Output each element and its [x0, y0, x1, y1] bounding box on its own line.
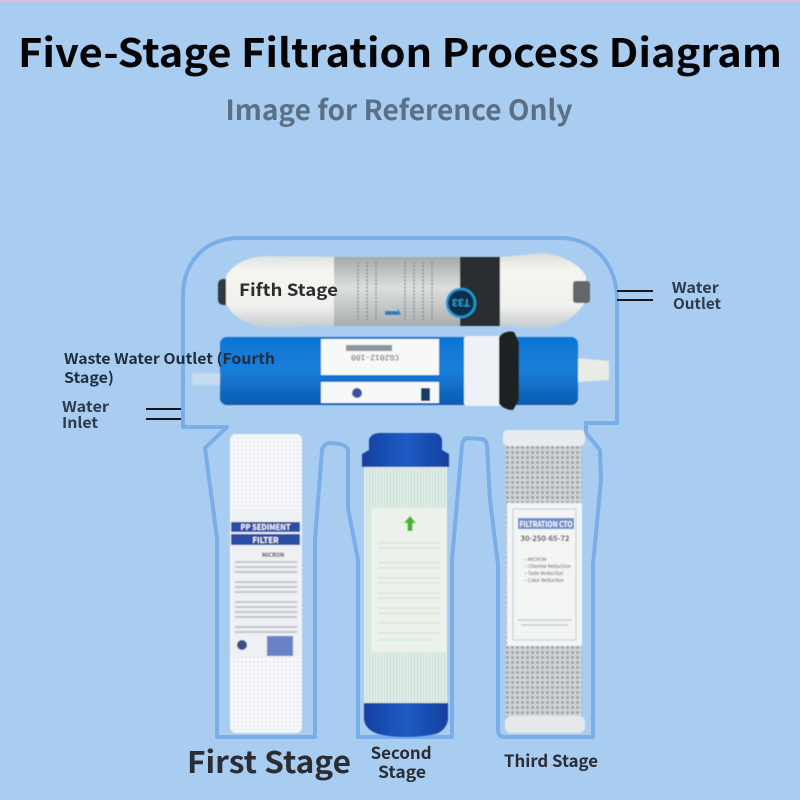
- label: [232, 509, 300, 657]
- dotted body: [230, 434, 302, 733]
- label fine print: [358, 262, 432, 320]
- label: second stage: Stage: [378, 759, 426, 783]
- top cap: [503, 430, 585, 446]
- blue banner: [518, 518, 574, 529]
- bottom cap: [505, 716, 585, 733]
- blue stripe: [321, 375, 439, 382]
- white housing: [226, 253, 586, 328]
- fourth stage filter: [192, 332, 609, 410]
- feature list: •Chlorine Reduction: [523, 563, 571, 570]
- badge: [352, 388, 362, 398]
- white band: [464, 336, 503, 406]
- white sticker: [321, 339, 439, 403]
- micron: MICRON: [262, 551, 284, 559]
- right stem: [575, 358, 609, 382]
- fine print: [235, 562, 297, 632]
- banner text 2: FILTER: [252, 535, 279, 546]
- feature list: •Taste Reduction: [523, 570, 564, 577]
- label: waste water outlet: Stage): [64, 367, 114, 388]
- silver label: [334, 257, 462, 326]
- label: waste water outlet: Waste Water Outlet (Fourth: [64, 348, 275, 369]
- label: water outlet: Outlet: [673, 293, 722, 314]
- code: 30-250-65-72: [520, 533, 570, 544]
- black ring: [499, 332, 519, 410]
- blue banner 2: [231, 534, 300, 545]
- green arrow: [404, 516, 416, 531]
- label: second stage: Second: [371, 740, 432, 764]
- second stage filter: [362, 433, 449, 737]
- model text: CG2012-100: [351, 352, 399, 361]
- ribbed body: [364, 466, 447, 706]
- sticker barcode: [346, 345, 392, 351]
- top cap: [362, 433, 449, 467]
- banner text 1: PP SEDIMENT: [240, 522, 290, 533]
- left stem: [192, 373, 224, 385]
- subtitle: Image for Reference Only: [226, 89, 572, 129]
- black label: [460, 257, 500, 326]
- first stage filter: [230, 434, 302, 733]
- label: [507, 503, 582, 646]
- label: water inlet: Inlet: [62, 412, 99, 433]
- title: Five-Stage Filtration Process Diagram: [18, 23, 782, 79]
- housing outline: [183, 238, 617, 737]
- feature list: •MICRON: [523, 556, 546, 563]
- label: third stage: Third Stage: [504, 748, 598, 772]
- fine print: [518, 620, 572, 625]
- label: [372, 508, 447, 652]
- flag: [267, 636, 293, 656]
- blue membrane body: [220, 337, 578, 405]
- banner text: FILTRATION CTO: [520, 519, 572, 530]
- label: fifth stage: Fifth Stage: [239, 276, 338, 301]
- logo: [421, 388, 430, 401]
- fifth stage filter: [218, 253, 590, 328]
- label: first stage: First Stage: [187, 738, 351, 782]
- bottom cap: [364, 703, 448, 737]
- logo mark: [237, 640, 247, 650]
- label: water outlet: Water: [672, 277, 719, 298]
- outlet pipe lines: [617, 291, 653, 300]
- blue badge: [447, 289, 475, 317]
- top pink edge: [0, 0, 800, 2]
- label: water inlet: Water: [62, 396, 109, 417]
- arrow on label: [385, 308, 401, 315]
- mesh body: [506, 444, 582, 724]
- fine print: [378, 543, 440, 640]
- feature list: •Color Reduction: [523, 577, 564, 584]
- blue badge: T33: [452, 296, 470, 311]
- right outlet: [573, 281, 590, 303]
- blue banner 1: [231, 522, 300, 532]
- left cap: [218, 279, 230, 305]
- inlet pipe lines: [146, 409, 181, 419]
- label frame: [513, 509, 576, 640]
- third stage filter: [503, 430, 585, 733]
